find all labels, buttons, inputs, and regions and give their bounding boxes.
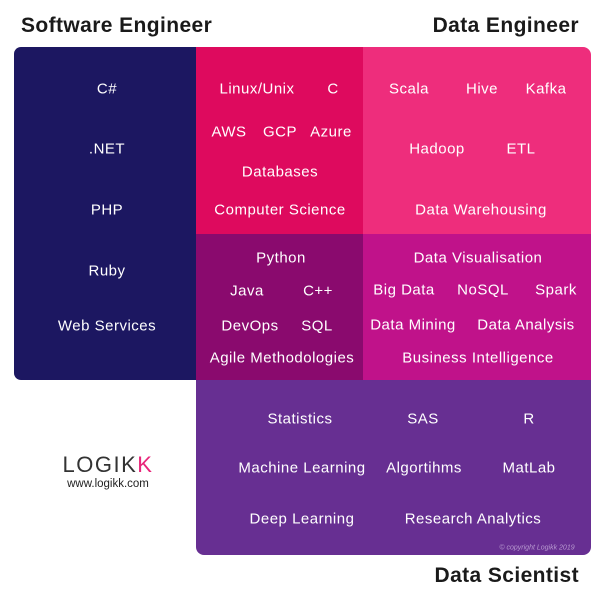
panel: all overlap xyxy=(196,234,363,380)
text: .NET xyxy=(89,140,125,158)
logo: LOGIKK xyxy=(63,452,153,477)
logo: www.logikk.com xyxy=(67,478,149,490)
panel: data engineer xyxy=(363,47,591,234)
text: Computer Science xyxy=(214,202,346,218)
DE skills: Scala xyxy=(389,80,429,98)
text: Hadoop xyxy=(409,140,465,158)
title: Data Engineer: Data Engineer xyxy=(433,14,579,37)
text: PHP xyxy=(91,202,123,218)
text: NoSQL xyxy=(457,282,509,298)
text: GCP xyxy=(263,124,297,140)
DE/DS skills: Data Visualisation xyxy=(414,250,542,266)
SE skills: C# xyxy=(97,80,117,98)
text: Business Intelligence xyxy=(402,350,554,366)
text: Agile Methodologies xyxy=(210,350,354,366)
text: Data Analysis xyxy=(477,316,575,334)
text: SAS xyxy=(407,410,439,428)
text: Hive xyxy=(466,80,498,98)
text: Data Mining xyxy=(370,316,456,334)
text: R xyxy=(523,410,535,428)
text: C xyxy=(327,80,339,98)
title: Software Engineer: Software Engineer xyxy=(21,14,212,37)
panel: DE/DS overlap xyxy=(363,234,591,380)
text: Azure xyxy=(310,124,352,140)
text: SQL xyxy=(301,318,333,334)
text: Research Analytics xyxy=(405,510,541,528)
text: Kafka xyxy=(526,80,566,98)
text: ETL xyxy=(506,140,536,158)
text: Algortihms xyxy=(386,460,462,476)
title: Data Scientist: Data Scientist xyxy=(435,564,579,587)
text: C++ xyxy=(303,282,333,300)
text: Java xyxy=(230,282,264,300)
text: Big Data xyxy=(373,282,435,298)
text: Databases xyxy=(242,164,318,180)
text: Spark xyxy=(535,282,577,298)
panel: data scientist xyxy=(196,380,591,555)
text: AWS xyxy=(211,124,247,140)
text: Web Services xyxy=(58,318,156,334)
text: Ruby xyxy=(88,262,126,280)
logo xyxy=(63,452,153,490)
overlap skills: Python xyxy=(256,250,306,266)
panel: SE/DE overlap xyxy=(196,47,363,234)
SE/DE skills: Linux/Unix xyxy=(219,80,295,98)
text: MatLab xyxy=(502,460,556,476)
DS skills: Statistics xyxy=(267,410,333,428)
copyright: © copyright Logikk 2019 xyxy=(499,544,575,552)
text: Deep Learning xyxy=(250,510,354,528)
text: Data Warehousing xyxy=(415,202,547,218)
text: DevOps xyxy=(221,318,279,334)
text: Machine Learning xyxy=(238,460,366,476)
panel: software engineer xyxy=(14,47,198,380)
